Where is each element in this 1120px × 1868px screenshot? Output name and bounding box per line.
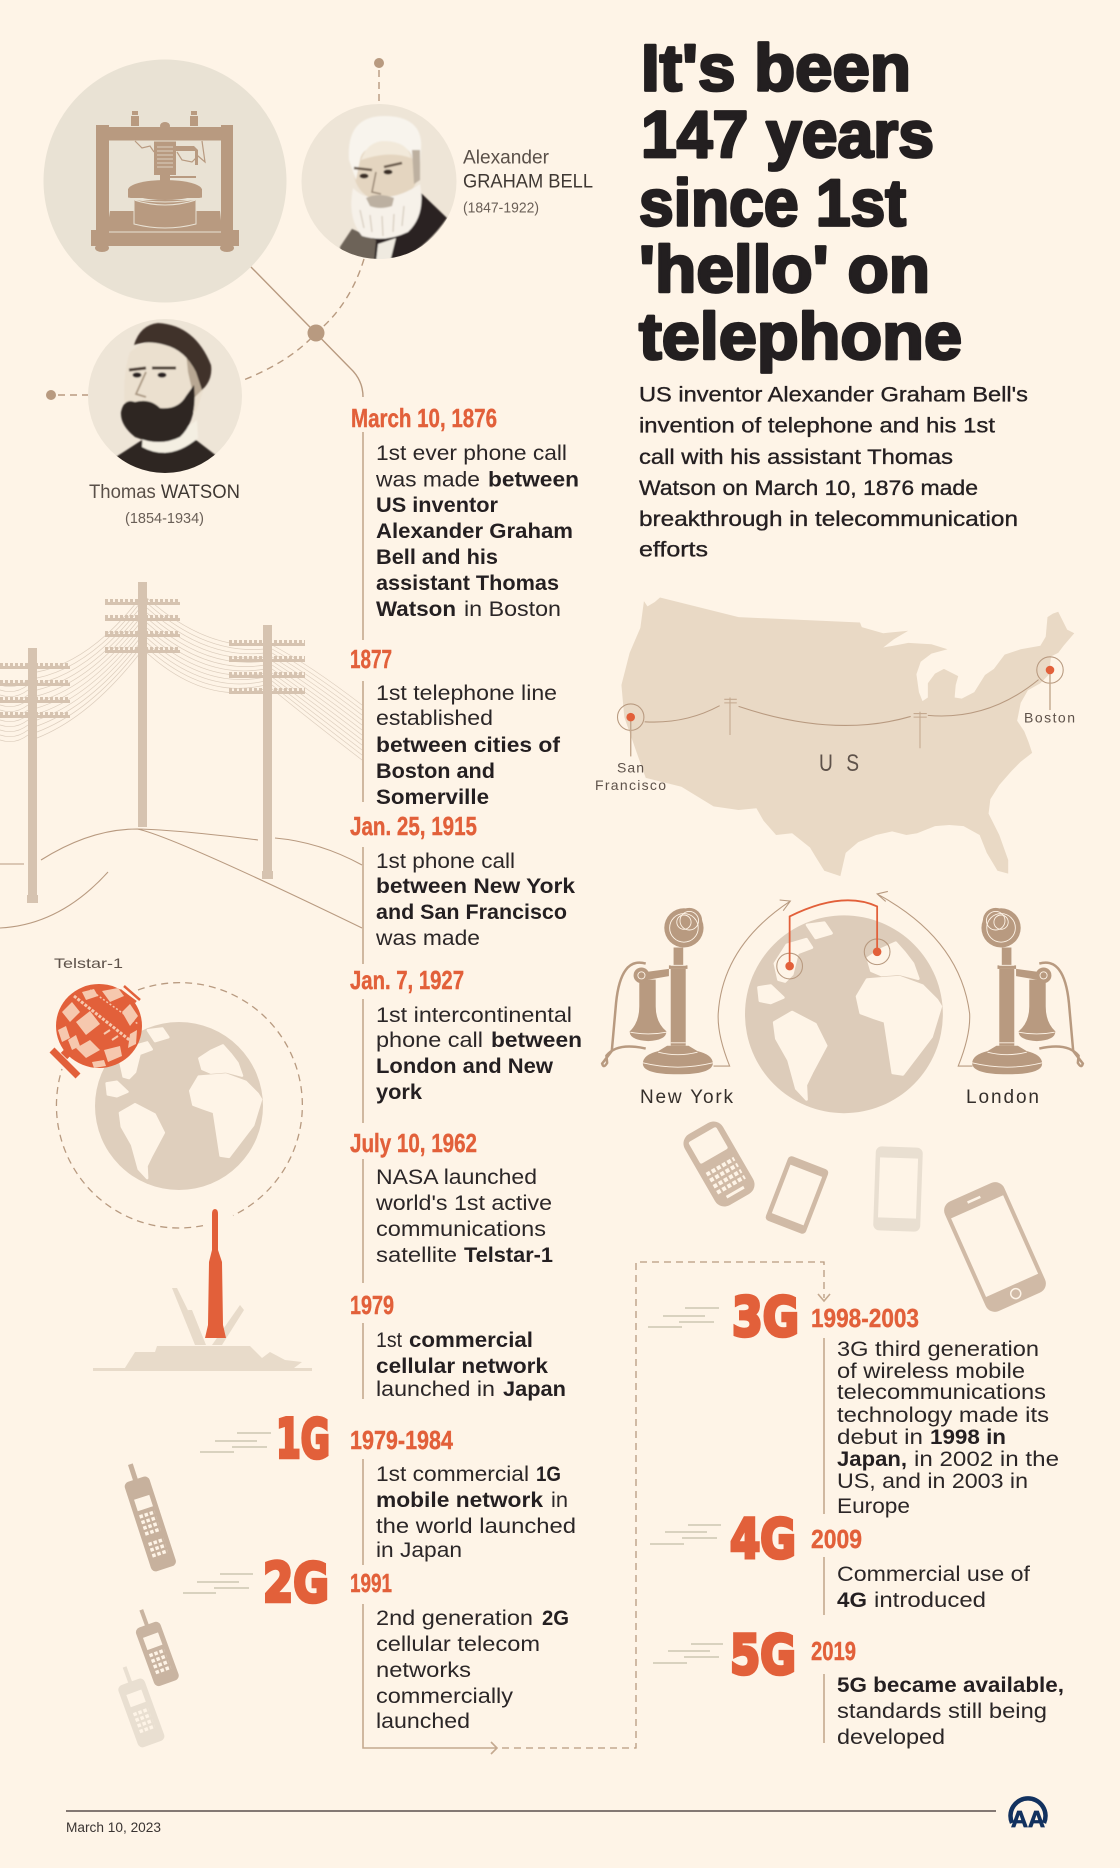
event: 3G 1998-2003: 3G bbox=[732, 1286, 799, 1348]
event: 1G 1979-1984: the world launched bbox=[376, 1514, 576, 1538]
event: Jan. 7, 1927: phone call bbox=[376, 1028, 483, 1052]
event: 1877 bbox=[350, 644, 561, 809]
event: July 10, 1962: satellite bbox=[376, 1243, 457, 1267]
intro text: efforts bbox=[639, 538, 708, 562]
event: July 10, 1962: NASA launched bbox=[376, 1165, 537, 1189]
event: 2G 1991: commercially bbox=[376, 1684, 513, 1708]
event: 3G 1998-2003: in 2002 in the bbox=[914, 1447, 1059, 1471]
map: US bbox=[621, 597, 1074, 876]
title: 147 years bbox=[641, 97, 934, 171]
icon: modern smartphone bbox=[941, 1179, 1049, 1315]
map labels bbox=[595, 710, 1075, 793]
event: 3G 1998-2003: 3G third generation bbox=[837, 1337, 1039, 1361]
event: 4G 2009: 4G bbox=[837, 1588, 867, 1612]
event: 1979: 1st bbox=[376, 1328, 402, 1352]
event: March 10, 1876: assistant Thomas bbox=[376, 571, 559, 595]
event: Jan. 25, 1915: between New York bbox=[376, 874, 575, 898]
event: 5G 2019: 5G became available, bbox=[837, 1673, 1064, 1697]
timeline rules bbox=[363, 432, 830, 1754]
intro text bbox=[639, 384, 1028, 562]
portrait: Alexander Graham Bell bbox=[302, 104, 456, 262]
event: March 10, 1876: Alexander Graham bbox=[376, 519, 573, 543]
pins and call line bbox=[777, 900, 890, 979]
event: 1877: 1st telephone line bbox=[376, 681, 557, 705]
utility poles bbox=[724, 697, 927, 748]
illustration: Telstar-1 orbit bbox=[52, 955, 302, 1228]
event: 1979: launched in bbox=[376, 1377, 495, 1401]
icon: 2G handset bbox=[129, 1605, 180, 1688]
event: 3G 1998-2003: technology made its bbox=[837, 1403, 1049, 1427]
event: 4G 2009: 2009 bbox=[811, 1524, 862, 1554]
event: March 10, 1876 bbox=[351, 403, 579, 621]
map labels: Francisco bbox=[595, 777, 666, 793]
telephone device panel bbox=[44, 60, 286, 302]
event: 3G 1998-2003: telecommunications bbox=[837, 1380, 1046, 1404]
event: 1979: Japan bbox=[503, 1377, 566, 1401]
event: 2G 1991: cellular telecom bbox=[376, 1632, 540, 1656]
event: March 10, 1876: in Boston bbox=[464, 597, 561, 621]
event: 3G 1998-2003: of wireless mobile bbox=[837, 1359, 1025, 1383]
telephone: London bbox=[972, 908, 1083, 1074]
event: Jan. 25, 1915: and San Francisco bbox=[376, 900, 567, 924]
event: 2G 1991: 2nd generation bbox=[376, 1606, 533, 1630]
event: 2G 1991 bbox=[183, 1552, 569, 1733]
icon: tablet phone bbox=[765, 1155, 829, 1235]
pole 3 bbox=[229, 625, 305, 879]
event: Jan. 7, 1927: London and New bbox=[376, 1054, 553, 1078]
intro text: US inventor Alexander Graham Bell's bbox=[639, 384, 1028, 406]
event: 3G 1998-2003: Europe bbox=[837, 1494, 910, 1518]
event: 3G 1998-2003: debut in bbox=[837, 1425, 923, 1449]
event: March 10, 1876: 1st ever phone call bbox=[376, 441, 567, 465]
labels: New York and London bbox=[640, 1087, 1039, 1108]
event: 3G 1998-2003: 1998 in bbox=[930, 1425, 1006, 1449]
event: March 10, 1876: Watson bbox=[376, 597, 456, 621]
label: Alexander Graham Bell: (1847-1922) bbox=[463, 200, 539, 216]
event: 1G 1979-1984 bbox=[200, 1408, 576, 1562]
intro text: call with his assistant Thomas bbox=[639, 446, 953, 469]
intro text: breakthrough in telecommunication bbox=[639, 508, 1018, 531]
event: March 10, 1876: was made bbox=[375, 468, 480, 492]
phone line bbox=[645, 680, 1039, 725]
label: Thomas Watson bbox=[89, 482, 240, 527]
label: Alexander Graham Bell: GRAHAM BELL bbox=[463, 172, 593, 192]
illustration: intercontinental call bbox=[602, 891, 1083, 1113]
event: 3G 1998-2003: 1998-2003 bbox=[811, 1303, 919, 1333]
labels: New York and London: London bbox=[966, 1087, 1039, 1108]
event: Jan. 25, 1915: 1st phone call bbox=[376, 849, 515, 873]
event: 1877: Somerville bbox=[376, 785, 489, 809]
event: Jan. 25, 1915 bbox=[350, 811, 575, 950]
icon: 1G handset bbox=[118, 1460, 177, 1573]
connector lines bbox=[46, 58, 384, 400]
event: 1877: established bbox=[376, 706, 493, 730]
icon: faded smartphone bbox=[873, 1146, 923, 1232]
icon: faded 2G handset bbox=[111, 1662, 166, 1749]
label: Alexander Graham Bell: Alexander bbox=[463, 148, 550, 168]
event: 3G 1998-2003: Japan, bbox=[837, 1447, 907, 1471]
event: 2G 1991: 1991 bbox=[350, 1568, 392, 1598]
title: 'hello' on bbox=[639, 232, 930, 306]
event: 1877: 1877 bbox=[350, 644, 392, 674]
event: 1G 1979-1984: 1G bbox=[536, 1462, 561, 1486]
intro text: invention of telephone and his 1st bbox=[639, 414, 995, 438]
event: March 10, 1876: US inventor bbox=[376, 493, 499, 517]
event: 1G 1979-1984: in bbox=[551, 1488, 568, 1512]
telephone: New York bbox=[602, 908, 713, 1074]
event: 5G 2019: standards still being bbox=[837, 1699, 1047, 1723]
icon: early telephone bbox=[91, 111, 239, 252]
event: Jan. 7, 1927: between bbox=[491, 1028, 582, 1052]
event: 3G 1998-2003: US, and in 2003 in bbox=[837, 1469, 1028, 1493]
event: July 10, 1962: communications bbox=[376, 1217, 546, 1241]
event: 1G 1979-1984: in Japan bbox=[376, 1538, 462, 1562]
satellite bbox=[52, 984, 142, 1076]
icon: rocket bbox=[205, 1209, 226, 1338]
intro text: Watson on March 10, 1876 made bbox=[639, 477, 978, 500]
portrait: Thomas Watson bbox=[88, 319, 242, 478]
event: 1979 bbox=[350, 1290, 566, 1401]
labels: New York and London: New York bbox=[640, 1087, 734, 1108]
label: Thomas Watson: Thomas WATSON bbox=[89, 482, 240, 503]
event: 3G 1998-2003 bbox=[648, 1286, 1059, 1518]
illustration: telephone poles and wires bbox=[0, 582, 362, 928]
label: Thomas Watson: (1854-1934) bbox=[125, 510, 204, 527]
map labels: Boston bbox=[1024, 710, 1075, 726]
event: July 10, 1962 bbox=[350, 1128, 553, 1267]
event: 4G 2009 bbox=[650, 1508, 1030, 1612]
event: March 10, 1876: between bbox=[488, 468, 579, 492]
event: March 10, 1876: Bell and his bbox=[376, 545, 498, 569]
title bbox=[639, 30, 962, 373]
pole 2 bbox=[105, 582, 180, 827]
event: 5G 2019 bbox=[653, 1624, 1064, 1749]
event: 4G 2009: introduced bbox=[874, 1588, 986, 1612]
event: Jan. 25, 1915: Jan. 25, 1915 bbox=[350, 811, 477, 841]
event: Jan. 7, 1927 bbox=[350, 965, 582, 1104]
map labels: U S bbox=[819, 750, 859, 777]
title: telephone bbox=[639, 299, 962, 373]
event: March 10, 1876: March 10, 1876 bbox=[351, 403, 497, 433]
illustration: launch platform bbox=[93, 1288, 312, 1371]
label: Alexander Graham Bell bbox=[463, 148, 593, 216]
event: 2G 1991: 2G bbox=[263, 1552, 329, 1614]
event: 1877: Boston and bbox=[376, 759, 495, 783]
event: July 10, 1962: Telstar-1 bbox=[464, 1243, 553, 1267]
event: 1G 1979-1984: 1G bbox=[276, 1408, 330, 1470]
event: 4G 2009: Commercial use of bbox=[837, 1562, 1030, 1586]
event: July 10, 1962: world's 1st active bbox=[375, 1191, 552, 1215]
event: 1877: between cities of bbox=[376, 733, 561, 757]
event: Jan. 7, 1927: Jan. 7, 1927 bbox=[350, 965, 464, 995]
event: 2G 1991: launched bbox=[376, 1709, 470, 1733]
footer: March 10, 2023 bbox=[66, 1820, 161, 1835]
label: Telstar-1: Telstar-1 bbox=[54, 955, 123, 971]
event: 1G 1979-1984: mobile network bbox=[376, 1488, 543, 1512]
event: Jan. 7, 1927: 1st intercontinental bbox=[376, 1003, 572, 1027]
arc arrows bbox=[714, 891, 972, 1066]
pin: Boston bbox=[1037, 657, 1063, 710]
event: 2G 1991: networks bbox=[376, 1658, 471, 1682]
pole 1 bbox=[0, 648, 70, 903]
event: 1979: 1979 bbox=[350, 1290, 394, 1320]
globe bbox=[745, 915, 943, 1113]
event: Jan. 7, 1927: york bbox=[376, 1080, 422, 1104]
event: 2G 1991: 2G bbox=[542, 1606, 569, 1630]
icon: keyboard smartphone bbox=[679, 1117, 759, 1211]
event: 1979: cellular network bbox=[376, 1354, 548, 1378]
logo: AA: AA bbox=[1011, 1806, 1045, 1832]
pin: San Francisco bbox=[617, 704, 644, 756]
illustration: US map with phone line bbox=[617, 597, 1074, 876]
event: 5G 2019: 2019 bbox=[811, 1636, 856, 1666]
event: 5G 2019: 5G bbox=[730, 1624, 796, 1686]
map labels: San bbox=[617, 760, 644, 776]
event: Jan. 25, 1915: was made bbox=[375, 926, 480, 950]
event: 5G 2019: developed bbox=[837, 1725, 945, 1749]
event: 1979: commercial bbox=[409, 1328, 533, 1352]
globe bbox=[95, 1022, 263, 1190]
event: 4G 2009: 4G bbox=[730, 1508, 796, 1570]
event: 1G 1979-1984: 1st commercial bbox=[376, 1462, 529, 1486]
event: July 10, 1962: July 10, 1962 bbox=[350, 1128, 477, 1158]
hill lines bbox=[0, 829, 362, 928]
title: It's been bbox=[641, 30, 911, 104]
event: 1G 1979-1984: 1979-1984 bbox=[350, 1425, 453, 1455]
title: since 1st bbox=[639, 166, 906, 240]
